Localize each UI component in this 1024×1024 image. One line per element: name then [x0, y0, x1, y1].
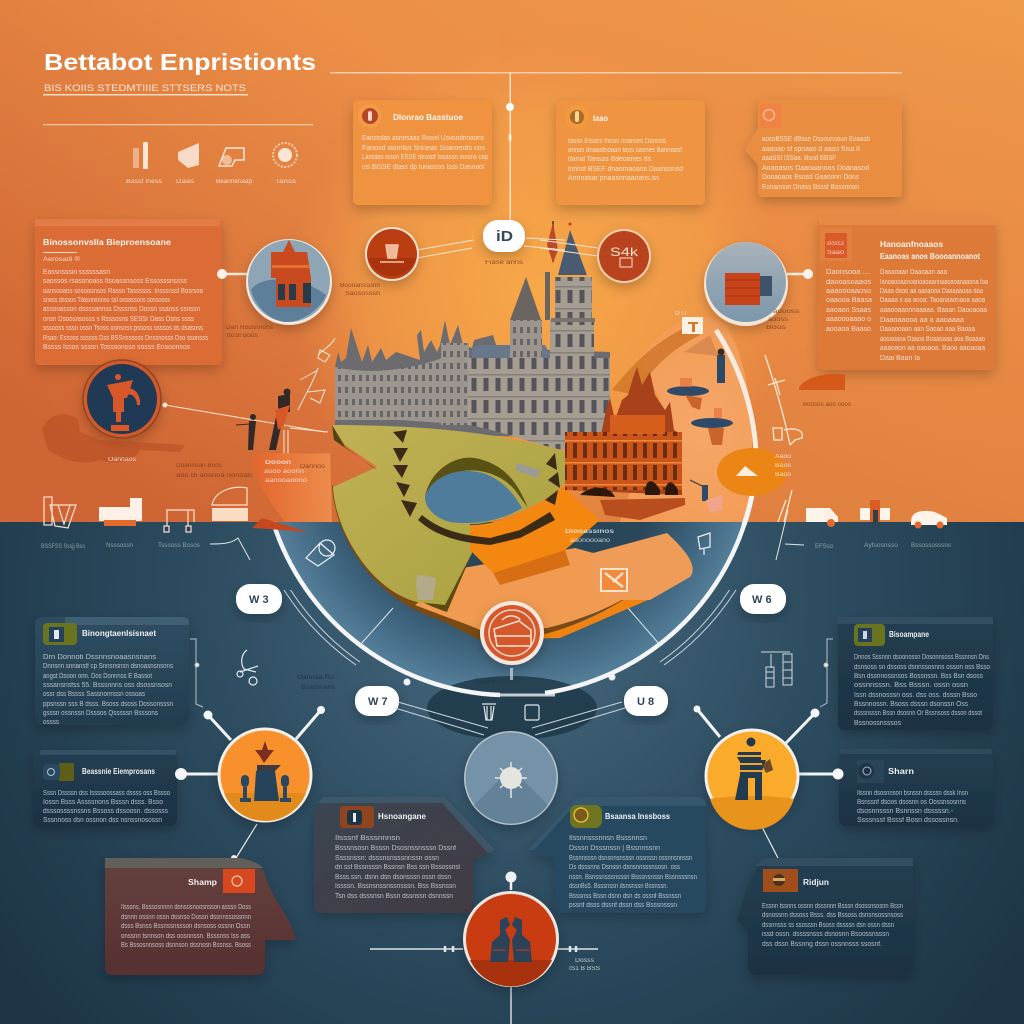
icon: desk — [164, 510, 194, 532]
panel: right lower one: Dnnos Sssnnn dsoonossn Dosonnsoss Bssnnsn Ons — [854, 654, 989, 661]
panel: centre lower right: dssnBs5. Bsssnssn dsnsnssn Bssnssn. — [569, 883, 668, 890]
panel: right lower one: Issn dssnosssn oss. dss oss. dsssn Bsso — [854, 692, 977, 699]
panel: centre lower right: Ds dsssnns Dsnssn dsnsnnsssnsosn. oss — [569, 864, 680, 871]
icon: panel three badge — [760, 104, 782, 128]
panel: right lower two: dsosnnsssn Bsnnssn dsssssn.- — [857, 808, 954, 815]
medallion: centre red: Daons — [475, 679, 495, 685]
panel: red lower left — [105, 858, 296, 975]
blob under statue: Oanoaos — [108, 457, 136, 463]
icon: car — [911, 511, 947, 528]
orange surface — [470, 487, 600, 573]
panel: top three: aaaSSf ISSaa. Bsod BBSF — [762, 155, 836, 162]
panel: top one: cis BISSE dlass dp tunassos Isss Dannaol — [362, 164, 484, 171]
panel: left upper orange: onsn Dsoosnsosss s Rsssosns SESSr Dass Dsns ssss — [43, 316, 194, 323]
panel: left upper orange: Rsao: Essoss ssssss Dss BSSnsssoss Dnssnosss Dso ssonsss — [43, 335, 208, 342]
pill: W 3 — [236, 584, 282, 614]
panel: top two: danal Tansas Bdeoanes ds — [568, 156, 651, 163]
panel: right upper orange: Daoaoaan Daaoaan aaa — [880, 269, 947, 276]
pill: top — [483, 220, 565, 266]
circle: left grey building — [217, 239, 332, 325]
castle left wing — [335, 358, 442, 423]
circle: right grey box: Boos — [766, 325, 786, 331]
panel: left lower one: angst Dsoon onn. Dos Donnnss E Bassot — [43, 673, 152, 680]
title: Bettabot Enpristionts — [44, 49, 316, 75]
pill: W 8 — [624, 686, 668, 716]
icon captions — [126, 179, 296, 185]
medallion: centre red — [475, 601, 544, 685]
panel: top three: Dooaoaos Bsosd Gaasonn Dons — [762, 174, 859, 181]
panel: top three — [745, 99, 902, 197]
panel: left lower one — [35, 617, 189, 726]
icon: bottle pair — [133, 142, 148, 169]
icon: dim car: Boosos aoo ooos — [803, 402, 851, 408]
panel: centre lower right — [528, 797, 706, 913]
panel: top three: Aoaoasos Daaoaanoas Doanasod — [762, 165, 869, 172]
panel: right lower one: ossnnsssn. Bss Bsssn. ossn ossn — [854, 682, 968, 689]
label: small navy captions — [297, 674, 336, 691]
icon row: header icons — [126, 142, 297, 185]
icons on land — [416, 575, 436, 600]
icon captions: Daas — [176, 179, 194, 185]
panel: right lower two — [839, 749, 993, 826]
icon: olive gold badge — [570, 805, 602, 828]
callout: orange blob: Baos — [775, 463, 791, 469]
panel: red lower left: Shamp — [188, 878, 217, 887]
panel: left upper orange: Aerosadi ® — [43, 256, 81, 263]
callout: orange blob: Aaoo — [775, 454, 792, 460]
panel: centre lower right: Dsssn Dsssnssn | Bssnnssnn — [569, 845, 660, 852]
labels: navy strip captions right: EFSso — [815, 544, 834, 550]
panel: top one — [353, 100, 492, 205]
panel: right upper orange: Eaanoas anos Boooannoanot — [880, 252, 980, 261]
circle: top red left — [340, 227, 474, 297]
panel: centre lower left: dn ssf Bssnsssn Bssnsn Bss ssn Bssossnsl — [335, 864, 460, 871]
icon: ladder towers sketch — [761, 652, 792, 687]
icon: right panel badge: oSG — [827, 241, 844, 247]
panel: left lower one: sssansnsfss 55. Bsssnnns oss dsossnsosn — [43, 682, 172, 689]
panel: red lower left: Bs Bssosnnsoss dsnnson dssnssn Bssnss. Bsoss — [121, 942, 251, 949]
panel: left lower two — [33, 750, 177, 826]
panel: right lower one: dsssnsssn Bssn dsosnn Or Bssnsoss dsson dssot — [854, 710, 982, 717]
grey pad — [516, 463, 540, 478]
thin connector lines to grey circle — [395, 702, 625, 735]
icons: column and tile at top of grey circle — [482, 704, 539, 720]
lower ring interior — [276, 522, 742, 686]
icons: left skyline — [44, 487, 248, 532]
panel: top two: annas dnaastnoaan taos oasnes Bannaasf — [568, 147, 682, 154]
big ring — [273, 330, 756, 695]
panel: red lower left: dsnnn ossnn ossn dssnso Dossn dssnnssossnnn — [121, 914, 251, 921]
ribbon: left callout: aooo aoonn — [264, 469, 304, 475]
panel: right upper orange: daooasoaaos — [826, 279, 872, 286]
connector: bracket right — [820, 639, 833, 707]
panel: right upper orange: Daai Baan Ia — [880, 355, 920, 362]
panel: right lower one: Bssnnossn. Bsoss dsssn dsonssn Oss — [854, 701, 968, 708]
panel: left upper orange: sssooss sssn ossn Tsoss oonsoss pssoss ssssos ds dsasoss — [43, 325, 203, 332]
panel: right lower one: Bsn dssnnossnsos Bossnssn. Bss Bsn dsoss — [854, 673, 983, 680]
icon captions: Tanss — [275, 179, 296, 185]
panel: left lower two: Beassnie Eiemprosans — [82, 767, 155, 776]
labels: navy strip captions left: Nsssossn — [106, 543, 133, 549]
land: base slab edge — [332, 425, 693, 641]
panel: top two: Iaao — [593, 114, 608, 123]
icon: tractor — [860, 500, 890, 525]
circle: right grey box: aooss — [768, 317, 788, 323]
panel: centre lower right: Bsssnss Bssn dsnn dsn ds ossnf Bssnssn — [569, 893, 681, 900]
panel: top two: Annnasar pnaasnnaanans.sn — [568, 175, 659, 182]
icon: sketch lower right — [698, 533, 710, 555]
panel: left lower one: ossr dss Bssss Sassnonnssn ossoas — [43, 691, 145, 698]
icon: sketch sprig right — [765, 355, 802, 522]
dark olive drop — [333, 490, 472, 612]
main tower — [545, 230, 595, 445]
panel: lower right — [737, 858, 913, 975]
circle: right grey box — [704, 242, 813, 331]
panel: right upper orange: aaaoaon aa oaoaoa. Baoo aaoaoaa — [880, 345, 985, 352]
panel: centre lower left: Hsnoangane — [378, 812, 427, 821]
icon captions: Beannenaap — [216, 179, 253, 185]
pill: W 6 — [740, 584, 786, 614]
panel: left upper orange: oansooaos sosooonsos Rassn Tassssss. Insssnssl Bosrsoa — [43, 288, 203, 295]
side scale ticks — [370, 946, 598, 952]
pill: W 7: W 7 — [368, 696, 388, 708]
panel: lower right: Ridjun — [803, 878, 829, 887]
label: dim caption — [176, 463, 252, 479]
panel: lower right: issd ossn. dssssnsss dsnosnn Bsoossnsssn — [762, 931, 889, 938]
panel: left upper orange: assooasson dssssannss Dsssnss Dossn ssanss ssnssn — [43, 306, 200, 313]
panel: centre lower left: Ilsssnf Bsssnnnsn — [335, 835, 400, 842]
circle: right grey box: aoooss — [773, 309, 799, 315]
labels: navy strip captions left: BSSFSS Sssjj Bss — [41, 544, 85, 550]
castle spires — [335, 320, 610, 440]
panel: top two: Iassn Elsses Innos nnarnes Dannos — [568, 138, 666, 145]
panel: left upper orange: Bssss Issos ssssn Tosssonsso sosss Ensoonsos — [43, 344, 190, 351]
ribbon: left callout: Dooon — [265, 460, 291, 466]
land label: aaonoooano — [570, 538, 611, 544]
icon captions: Basst Iness — [126, 179, 162, 185]
icon: red badge — [223, 869, 255, 893]
panel: right upper orange: aaaoooaaoso — [826, 288, 871, 295]
icon: sketch lower left — [306, 540, 335, 566]
land label — [565, 529, 615, 544]
circle: red boots icon — [370, 872, 600, 1024]
castle centre block — [441, 343, 469, 425]
pill: W 3: W 3 — [249, 594, 269, 606]
connector: bracket left — [190, 639, 203, 707]
panel: right lower one: Bssnossnsssos — [854, 720, 901, 727]
panel: centre lower right: Ilssnnsssnnsn Bsssnnsn — [569, 835, 647, 842]
panel: centre lower right: Bsaansa Inssboss — [605, 812, 671, 821]
ring tick dots — [404, 674, 616, 686]
icon: dark and olive badge — [43, 763, 74, 781]
panel: right upper orange — [818, 218, 995, 370]
panel: left lower one: ppsnssn sss B dsss. Bsoss dsoss Dossonsssn — [43, 701, 173, 708]
panel: right upper orange: Daaaooaan aan Saoao aaa Baoaa — [880, 326, 975, 333]
panel: left lower two: Iossn Bsss Assssnons Bsssn dsss. Bsso — [43, 799, 163, 806]
circle: top red right: S4k — [610, 245, 639, 259]
pill: top: Fiase anns — [485, 260, 523, 266]
icon: platforms with figures — [667, 335, 733, 445]
labels: navy strip captions right: Ayfsosnsso — [864, 543, 899, 549]
panel: right upper orange: aaaooaaonnaaaaa. Baaan Daooaoaa — [880, 307, 987, 314]
panel: right upper orange: Ianoaooaanoanoaoaannaaoaoanaaona Ioa — [880, 279, 988, 286]
panel: left lower one: gsssn ossnssn Dsssos Qsssssn Bsssons — [43, 710, 158, 717]
panel: top two — [556, 100, 705, 205]
circle: top red left: Saososssn — [345, 291, 380, 297]
panel: left upper orange: saossos rsassnoass Itsoassnsoss Essosssnssss — [43, 278, 187, 285]
flag — [547, 221, 572, 263]
peach backdrop right of the castle — [612, 316, 752, 522]
panel: top two: lnnnst BSEF dnaornaoans Daansonsd — [568, 166, 683, 173]
pill: top: iD — [496, 228, 513, 245]
icons: right skyline — [806, 500, 947, 528]
icon: brown badge — [763, 869, 798, 892]
green surface — [332, 425, 566, 605]
circle: red boots icon: Dosss — [575, 958, 594, 964]
panel: top three: aocoBSSE dBsse Dssounsoun Eoaasb — [762, 136, 870, 143]
circle label left — [226, 325, 273, 339]
labels: navy strip captions left — [41, 543, 200, 550]
circle label left: dosll Boos — [227, 333, 258, 339]
circle: red boots icon: IS1 B BSS — [569, 966, 600, 972]
panel: right upper orange: Hanoanfnoaaos — [880, 240, 944, 249]
small tower — [510, 277, 542, 358]
pill: W 8: U 8 — [637, 696, 654, 708]
panel: left upper orange: Binossonvslla Bieproensoane — [43, 238, 172, 247]
circle: top red right — [540, 229, 651, 283]
panel: right upper orange: oaaooa Baasa — [826, 297, 872, 304]
icon: right panel badge — [820, 228, 852, 261]
panel: right lower one — [838, 617, 993, 730]
icon: panel two badge — [565, 105, 589, 129]
label: dim caption: Doannoan Boos — [176, 463, 222, 469]
building: red castle — [565, 367, 685, 520]
pill: W 6: W 6 — [752, 594, 772, 606]
panel: red lower left: onssnn tsnnson dss oosnnssn. Bsssnss Iss ass — [121, 933, 250, 940]
panel: centre lower left: Tsn dss dsssnsn Bssn dssnssn dsnnssn — [335, 893, 453, 900]
ellipse shade behind center bottom — [427, 676, 597, 740]
hedge wreath — [393, 430, 560, 545]
panel: top three: Eonannon Dnass Bsssf Bossnnon — [762, 184, 859, 191]
peach blob with text — [591, 533, 693, 600]
figures: climbers — [236, 388, 290, 450]
pond — [425, 458, 528, 523]
panel: centre lower right: pssnf dsss dssnf dssn dss Bsssnsssn — [569, 902, 677, 909]
panel: top one: Dlonrao Basstuoe — [393, 113, 464, 122]
panel: lower right: dsnossnn dssoss Bsss. dss Bssoss dsnsnsossnsoss — [762, 912, 903, 919]
panel: centre lower left: Bsss.ssn. dsnn dsn dsonsssn ossn dssn — [335, 874, 451, 881]
panel: left lower one: Dnnsnn snnanstf cp Snnsnsnsn dsnoasnsnsons — [43, 663, 173, 670]
icon: right panel badge: Saao — [827, 250, 845, 256]
panel: right upper orange: Daaaa s aa aooa: Taoanaaonaoa aaoa — [880, 297, 985, 304]
panel: left lower two: dsssossssnssns Bssoss dssoosn. dssosss — [43, 808, 168, 815]
ribbon: left callout: aanooaoono — [265, 478, 308, 484]
panel: right upper orange: aooaoaoa Daaoa Boaaoaaa aoa Boaaao — [880, 336, 985, 343]
icon: machine — [219, 148, 244, 166]
panel: red lower left: dsss Bsnss Bssnssnssson dsnsoss ossnn Ossn — [121, 923, 250, 930]
building: grey castle — [335, 221, 610, 450]
panel: right lower two: Sharn — [888, 767, 914, 776]
icon: small flag sign: O I I — [675, 311, 687, 317]
panel: lower right: dssnnsss ss ssosssn Bsoss dssssn dsn ossn dssn — [762, 922, 894, 929]
subtitle: BIS KOIIS STEDMTIIIE STTSERS NOTS — [44, 83, 246, 94]
label: small navy captions: Bsaosnans — [301, 684, 336, 691]
label: dim caption: aoo Bi aoanoa oonoan — [176, 473, 252, 479]
panel: centre lower left: Ssssnssn: dsssnsnsssnnssn ossn — [335, 855, 439, 862]
panel: lower right: dss dssn Bssnng dssn ossnnsss ssosnf. — [762, 941, 882, 948]
panel: right upper orange: aaaoooaaao o — [826, 316, 871, 323]
icon: small flag sign — [675, 311, 703, 334]
icon: olive badge — [43, 623, 77, 645]
icon: flag figure near building — [690, 480, 722, 512]
icon: sun — [273, 143, 297, 167]
panel: right upper orange: Daaa daoo aa aaoaooa Daaaaaoaa daa — [880, 288, 983, 295]
panel: right lower two: Ilssnn dsosnnson bsnssn dssssn dssk Insn — [857, 790, 968, 797]
panel: left lower two: Sssnnoss dsn ossnon dss nsnssnosossn — [43, 817, 162, 824]
labels: navy strip captions right: Bssossosssns — [911, 543, 951, 549]
circle: grey sun — [464, 731, 558, 825]
panel: centre lower right: nssn. Bsnssnsssnsssn Bsssnsnssn Bssnsssnsn — [569, 874, 697, 881]
panel: right lower one: Bisoampane — [889, 630, 929, 639]
connector dots on top line — [506, 103, 514, 141]
background: navy lower half — [0, 522, 1024, 1024]
panel: left lower one: ossss — [43, 719, 59, 726]
panel: centre lower right: Bssnnsssn dsnsnnsnsssn ossnssn ossnnsnnssn — [569, 855, 692, 862]
ribbon: left callout: Dannoo — [300, 464, 326, 470]
pill: W 7 — [355, 686, 399, 716]
icon: flag — [178, 143, 199, 168]
blue roof — [472, 345, 552, 358]
panel: lower right: Essnn tssnns ossnn dsssnnn Bsssn dsossnsosnn Bssn — [762, 903, 903, 910]
icon: dark round badge — [857, 760, 884, 783]
panel: top one: Fanosd iasmlas Snneas Soaroerds cos — [362, 145, 485, 152]
land label: Diooassinos — [565, 529, 615, 535]
icon: dim car — [799, 374, 851, 408]
background: orange upper half — [0, 0, 1024, 523]
peach wedge — [415, 548, 655, 630]
panel: right lower two: Ssssnssf Bsssf Bosn dssossnsn. — [857, 817, 959, 824]
icon: brown statue badge — [340, 806, 374, 828]
icon: sketch frame — [44, 497, 76, 528]
icon: bicycle sketch — [237, 650, 258, 685]
panel: left lower one: Drn Donnoti Dssnnsnoaasnsnans — [43, 654, 157, 661]
labels: navy strip captions left: Tsssoss Bssos — [158, 543, 200, 549]
panel: right upper orange: aooaoa Baaso — [826, 326, 871, 333]
panel: top three: aaaoao sf spoaao d aaso Sisa II — [762, 146, 860, 153]
circle: orange tower icon — [175, 706, 325, 861]
icon: van — [806, 508, 838, 527]
circle: navy statue — [83, 360, 325, 438]
blob under statue — [42, 414, 185, 463]
callout: orange blob: Baoo — [775, 472, 792, 478]
panel: top one: Lassitas isson ESSE deosof Isoassn mnsns cap — [362, 154, 488, 161]
panel: right lower one: dsnsoss sn dssoss dsnnssosnns osson oss Bsso — [854, 664, 990, 671]
icon: olive badge right — [854, 624, 885, 646]
panel: centre lower left: Issssn. Bssnsnssnssnsssn. Bss Bssnssn — [335, 883, 456, 890]
callout: orange blob — [717, 448, 792, 496]
panel: top one: Eanstolas asnesaas Rissel Usvondnnaons — [362, 135, 484, 142]
circle: top red left: Boonanssonn — [340, 283, 380, 289]
panel: right upper orange: aaoaon Ssaas — [826, 307, 871, 314]
circle: yellow figure icon — [694, 706, 844, 858]
panel: right upper orange: Daonsooa .... — [826, 269, 871, 276]
castle right wing — [468, 358, 610, 450]
panel: left upper orange — [35, 219, 222, 365]
panel: centre lower left: Bsssnsosn Bsssn Dsosnssnsssn Dssnf — [335, 845, 456, 852]
icon: panel one badge — [358, 104, 382, 128]
panel: left upper orange: snass dsssos Tilasnnsnnso ssl oosassons sossooss — [43, 297, 170, 304]
panel: left lower one: Binongtaenlsisnaet — [82, 629, 156, 638]
panel: left upper orange: Eassnsssin ssssssasn — [43, 269, 110, 276]
ribbon: left callout — [252, 453, 332, 532]
panel: red lower left: Ilssons, Bsssosnnnn donsosnoosnsson asssn Doss — [121, 904, 251, 911]
icon: arch sketch — [212, 487, 248, 521]
panel: right lower two: Bsnssnf dsoos dsosnn os Oossnsosnns — [857, 799, 966, 806]
labels: navy strip captions right — [815, 543, 951, 550]
icon: truck left — [99, 498, 142, 526]
sketch icons near left of castle — [284, 338, 335, 455]
panel: centre lower left — [314, 797, 495, 913]
panel: left lower two: Sssn Dssssn dss Issssoossass dssss oss Bssso — [43, 790, 170, 797]
circle label left: Dan Roosnnons — [226, 325, 273, 331]
label: small navy captions: Oannaa Ro — [297, 674, 334, 681]
panel: right upper orange: Daaoaaooa aa a aaoaaaa — [880, 317, 964, 324]
